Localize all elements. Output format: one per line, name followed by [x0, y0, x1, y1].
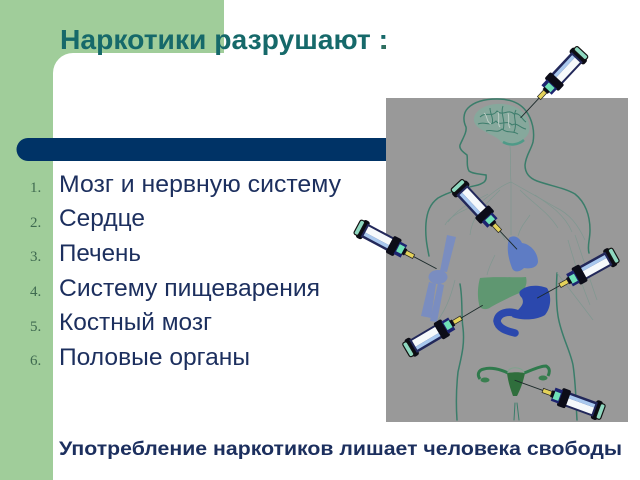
numbered list: 4. — [30, 284, 41, 300]
numbered list: 2. — [30, 215, 41, 231]
numbered list: 3. — [30, 249, 41, 265]
numbered list: 6. — [30, 353, 41, 369]
syringe: heart — [449, 177, 524, 256]
syringe: stomach — [532, 246, 621, 307]
syringe: brain — [513, 44, 590, 125]
numbered list: Печень — [59, 240, 141, 267]
heart — [508, 236, 538, 271]
bottom caption: Употребление наркотиков лишает человека свободы — [59, 438, 622, 460]
stomach — [497, 286, 550, 333]
grey anatomy panel — [386, 98, 628, 422]
numbered list: Половые органы — [59, 344, 250, 371]
title: Наркотики разрушают : — [60, 24, 388, 55]
syringe: liver — [401, 297, 488, 359]
brain — [474, 104, 530, 145]
numbered list — [30, 171, 341, 371]
numbered list: Костный мозг — [59, 309, 212, 336]
nerves — [438, 146, 597, 320]
numbered list: Сердце — [59, 205, 145, 232]
numbered list: Мозг и нервную систему — [59, 171, 341, 198]
small bullet dot — [382, 45, 386, 49]
navy divider bar — [17, 138, 387, 161]
body outline — [426, 99, 590, 420]
arm bone — [421, 235, 456, 322]
syringe: reproductive organs — [511, 371, 606, 422]
reproductive organs — [478, 366, 549, 396]
liver — [478, 277, 527, 309]
numbered list: 1. — [30, 180, 41, 196]
numbered list: 5. — [30, 319, 41, 335]
numbered list: Систему пищеварения — [59, 275, 320, 302]
syringe: bone — [352, 218, 441, 278]
